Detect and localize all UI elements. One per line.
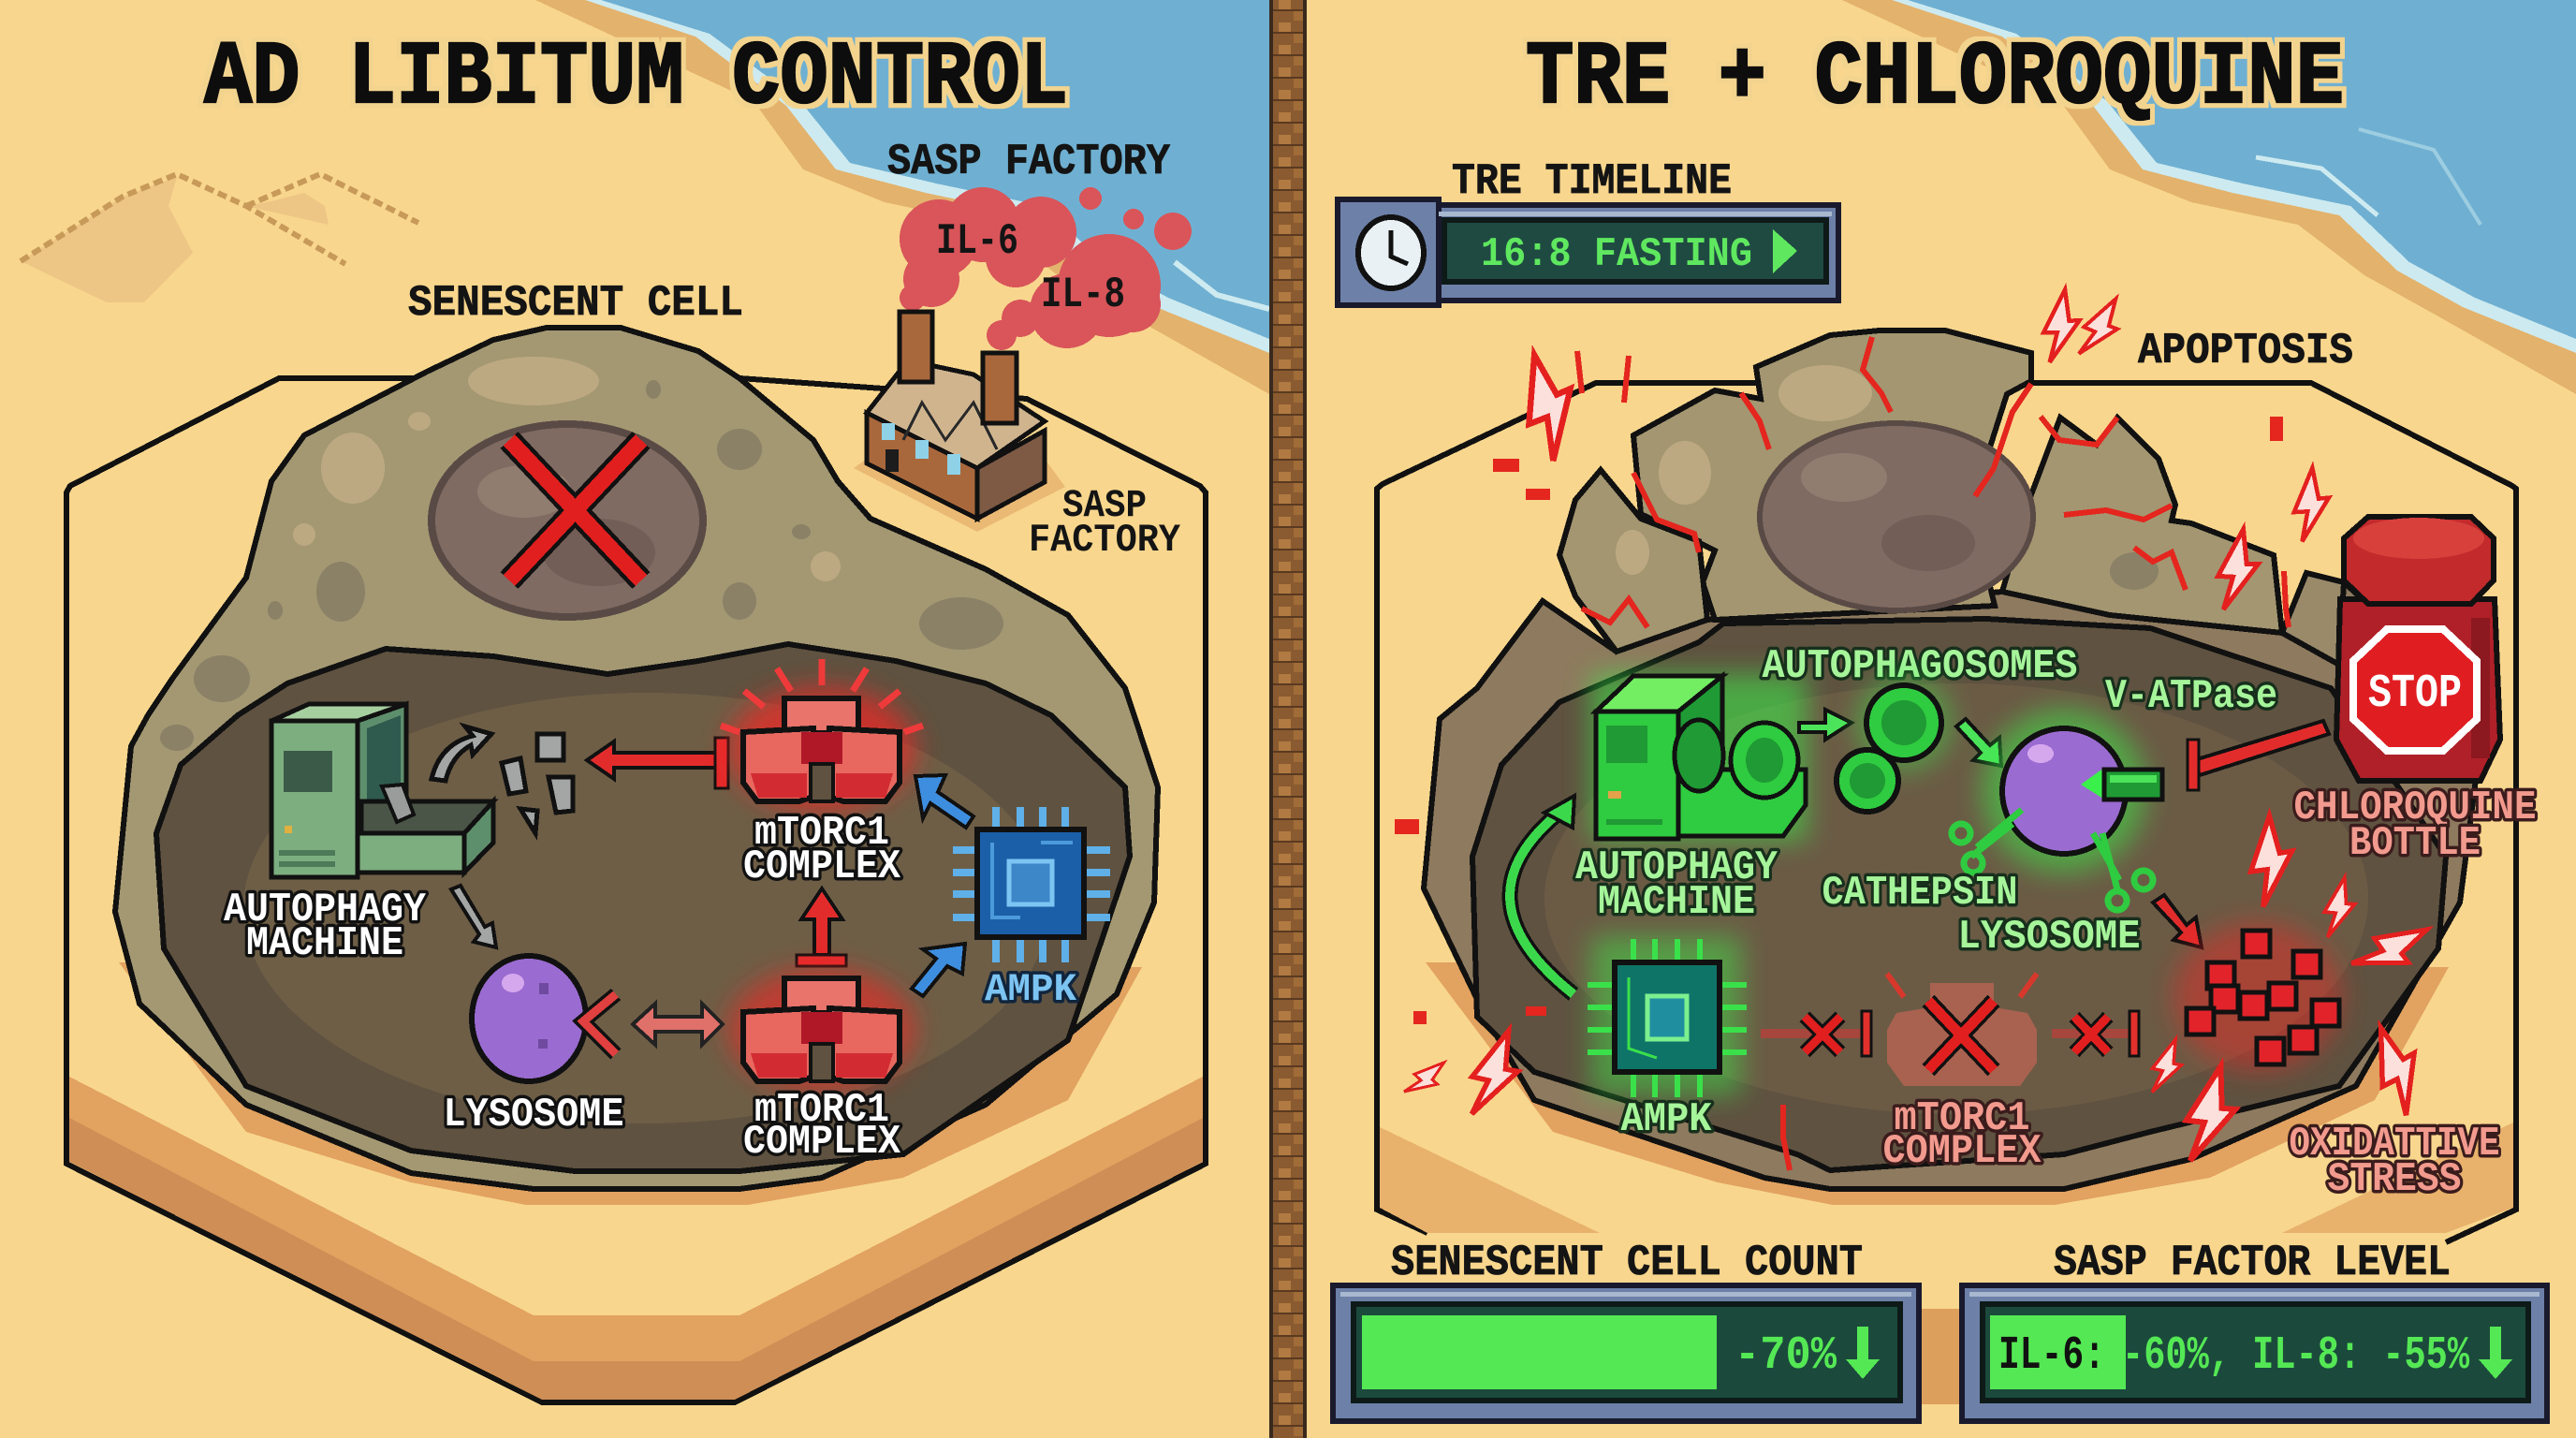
widget: fasting timeline bbox=[1338, 199, 1838, 305]
label: sasp factory lower: FACTORY bbox=[1029, 518, 1181, 563]
label: sasp factory lower bbox=[1029, 483, 1181, 563]
arrow: blue ampk to top mtorc1 bbox=[915, 775, 973, 828]
label: autophagy machine bbox=[224, 887, 427, 967]
debris pieces bbox=[502, 734, 573, 833]
smoke cloud with cytokines: IL-6 bbox=[936, 217, 1018, 266]
icon: inhibited mtorc1 with X bbox=[1887, 974, 2037, 1086]
inner cytoplasm cavity bbox=[1472, 619, 2446, 1170]
nucleus bbox=[1760, 423, 2033, 610]
arrow: green curved feedback bbox=[1510, 796, 1574, 994]
arrow: gray recycling curve bbox=[432, 726, 491, 781]
label: autophagy machine: AUTOPHAGY bbox=[224, 887, 427, 933]
widget: fasting timeline: 16:8 FASTING bbox=[1481, 231, 1752, 278]
label: mtorc1 complex top bbox=[743, 810, 901, 890]
label: mtorc1 complex bottom: mTORC1 bbox=[754, 1087, 889, 1134]
label: ampk: AMPK bbox=[1621, 1096, 1712, 1143]
label: mtorc1 complex bottom bbox=[743, 1087, 901, 1166]
icon: lysosome bbox=[472, 956, 616, 1081]
ocean and shoreline, left bbox=[535, 0, 1269, 394]
label: autophagy machine: MACHINE bbox=[1598, 879, 1755, 926]
label: autophagy machine: AUTOPHAGY bbox=[1575, 844, 1778, 891]
icon: ampk chip, active bbox=[1588, 936, 1747, 1097]
arrow: red inhibition upward bbox=[797, 888, 846, 966]
label: tre timeline: TRE TIMELINE bbox=[1452, 157, 1732, 206]
label: oxidative stress: STRESS bbox=[2327, 1156, 2462, 1203]
label: chloroquine bottle: CHLOROQUINE bbox=[2293, 785, 2537, 831]
label: sasp factor level: SASP FACTOR LEVEL bbox=[2054, 1239, 2451, 1287]
inner cytoplasm cavity bbox=[156, 644, 1130, 1171]
icon: autophagosomes bbox=[1837, 674, 1953, 812]
icon: chloroquine bottle with stop sign bbox=[2336, 517, 2500, 781]
label: sasp factory top: SASP FACTORY bbox=[887, 138, 1170, 186]
label: oxidative stress: OXIDATTIVE bbox=[2290, 1121, 2499, 1167]
label: mtorc1 complex bbox=[1883, 1095, 2042, 1175]
icon: glowing autophagy machine bbox=[1591, 674, 1807, 841]
icon: autophagy machine bbox=[271, 704, 493, 877]
meter: senescent cell count: -70% bbox=[1734, 1329, 1837, 1383]
label: chloroquine bottle: BOTTLE bbox=[2349, 820, 2481, 867]
meter: sasp factor level: -60%, IL-8: -55% bbox=[2122, 1329, 2470, 1383]
label: apoptosis: APOPTOSIS bbox=[2138, 327, 2353, 375]
ocean and shoreline, right bbox=[1842, 0, 2576, 394]
label: autophagosomes: AUTOPHAGOSOMES bbox=[1762, 643, 2078, 690]
label: oxidative stress bbox=[2290, 1121, 2499, 1203]
label: senescent cell count: SENESCENT CELL COUNT bbox=[1391, 1239, 1863, 1287]
smoke cloud with cytokines: IL-8 bbox=[1041, 271, 1125, 319]
bolts and sparks around the membrane bbox=[1395, 287, 2331, 1123]
panel: ad libitum control bbox=[21, 0, 1269, 1402]
arrow: red inhibition to debris bbox=[587, 738, 728, 788]
cracked senescent cell membrane bbox=[1424, 330, 2476, 1189]
label: lysosome: LYSOSOME bbox=[1958, 914, 2140, 961]
label: ampk: AMPK bbox=[985, 967, 1077, 1012]
smoke cloud with cytokines bbox=[900, 187, 1192, 350]
icon: oxidative stress ros cluster bbox=[2174, 922, 2342, 1072]
oxidative stress bolts bbox=[2144, 816, 2437, 1168]
label: lysosome: LYSOSOME bbox=[444, 1092, 623, 1138]
arrow: gray down to lysosome bbox=[451, 886, 496, 947]
label: mtorc1 complex top: COMPLEX bbox=[743, 844, 901, 890]
hexagonal platform outline bbox=[1377, 383, 2516, 1242]
title: TRE + CHLOROQUINE bbox=[1526, 27, 2344, 129]
senescent cell body bbox=[115, 328, 1158, 1189]
label: senescent cell: SENESCENT CELL bbox=[408, 279, 743, 328]
icon: mtorc1 top bbox=[721, 659, 923, 811]
label: mtorc1 complex top: mTORC1 bbox=[754, 810, 889, 857]
membrane cracks bbox=[1582, 337, 2289, 1170]
icon: cathepsin scissors bbox=[1952, 810, 2153, 910]
label: autophagy machine bbox=[1575, 844, 1778, 926]
arrow: machine to autophagosomes bbox=[1799, 710, 1852, 740]
label: mtorc1 complex: COMPLEX bbox=[1883, 1128, 2042, 1175]
label: mtorc1 complex: mTORC1 bbox=[1895, 1095, 2029, 1142]
panel: tre + chloroquine bbox=[1333, 0, 2576, 1421]
sand dunes bbox=[21, 174, 418, 302]
label: sasp factory lower: SASP bbox=[1062, 483, 1147, 528]
hexagonal platform bbox=[66, 378, 1206, 1402]
factory icon bbox=[854, 312, 1065, 532]
icon: chloroquine bottle with stop sign: STOP bbox=[2368, 668, 2462, 721]
label: v-atpase: V-ATPase bbox=[2105, 673, 2277, 720]
center divider bbox=[1269, 0, 1307, 1438]
label: cathepsin: CATHEPSIN bbox=[1822, 870, 2018, 917]
label: mtorc1 complex bottom: COMPLEX bbox=[743, 1119, 901, 1166]
meter: senescent cell count bbox=[1333, 1285, 1919, 1421]
arrow: red to ros bbox=[2153, 895, 2202, 947]
arrow: blocked inhibition left bbox=[1761, 1011, 1871, 1056]
label: chloroquine bottle bbox=[2293, 785, 2537, 867]
meter: sasp factor level bbox=[1962, 1285, 2547, 1421]
label: autophagy machine: MACHINE bbox=[246, 920, 403, 967]
connector between meters bbox=[1921, 1309, 1960, 1404]
meter: sasp factor level: IL-6: bbox=[1998, 1329, 2105, 1383]
icon: lysosome with v-atpase plug bbox=[1982, 709, 2162, 873]
arrow: blocked inhibition right bbox=[2052, 1011, 2139, 1056]
nucleus with red X bbox=[432, 424, 703, 617]
arrow: red inhibition of v-atpase bbox=[2188, 721, 2329, 790]
title: AD LIBITUM CONTROL bbox=[204, 27, 1068, 129]
arrow: blue ampk from lower mtorc1 bbox=[912, 944, 965, 996]
icon: mtorc1 bottom bbox=[728, 968, 915, 1092]
arrow: autophagosome to lysosome bbox=[1956, 719, 2001, 766]
icon: ampk chip bbox=[953, 807, 1110, 962]
arrow: double headed lysosome to mtorc1 bbox=[633, 1004, 723, 1045]
